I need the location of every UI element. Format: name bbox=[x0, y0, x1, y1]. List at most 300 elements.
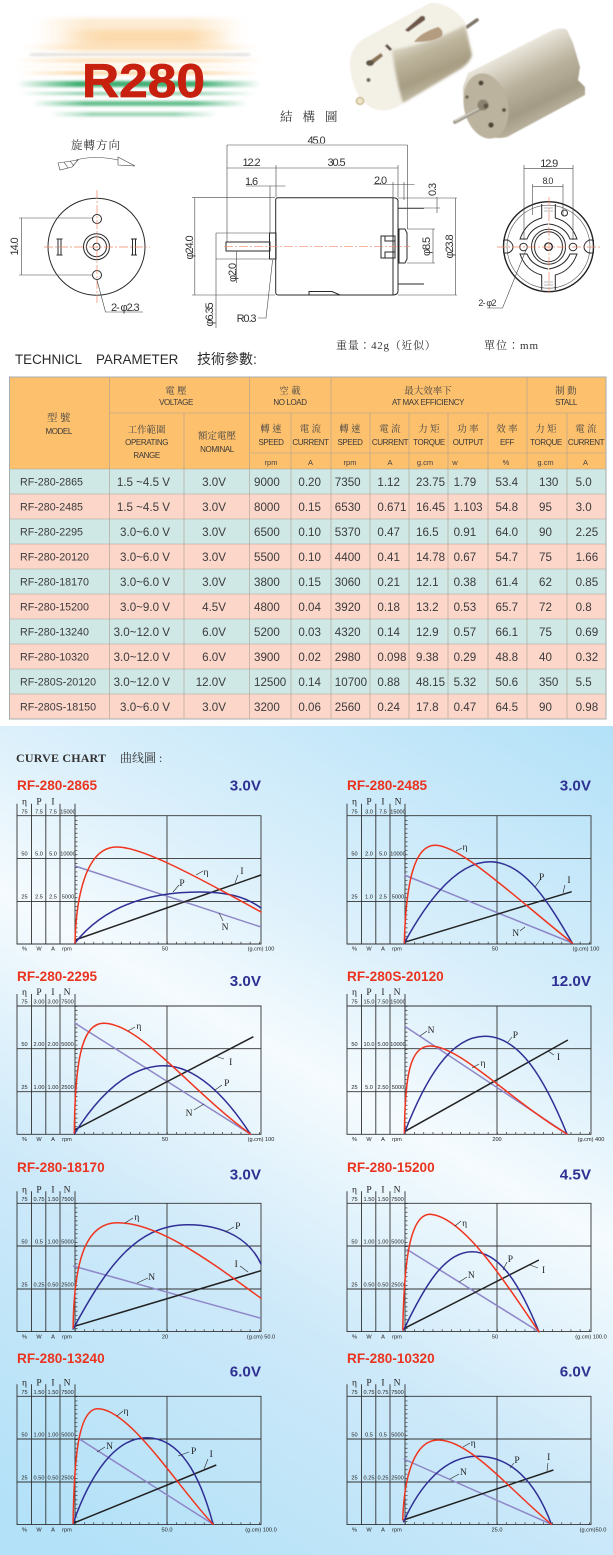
chart: RF-280-2295: P bbox=[36, 988, 42, 998]
table rows: 4400 bbox=[335, 551, 361, 564]
chart: RF-280-2865: 15000 bbox=[60, 809, 76, 815]
chart: RF-280-2485: 5000 bbox=[392, 895, 404, 901]
chart: RF-280-15200: rpm bbox=[392, 1334, 402, 1340]
chart: RF-280-13240: 50.0 bbox=[162, 1527, 172, 1533]
table rows: RF-280S-18150 bbox=[20, 702, 96, 714]
table header: STALL bbox=[555, 398, 578, 407]
chart: RF-280-10320: N bbox=[460, 1468, 467, 1478]
chart: RF-280-2485: 2.5 bbox=[379, 895, 387, 901]
chart: RF-280-2295: 25 bbox=[21, 1085, 28, 1091]
table rows: 0.15 bbox=[298, 576, 321, 589]
table rows: 40 bbox=[539, 651, 552, 664]
chart: RF-280-18170: 2500 bbox=[61, 1282, 74, 1288]
chart: RF-280-15200: P bbox=[508, 1255, 513, 1265]
chart: RF-280S-20120: 75 bbox=[351, 1000, 358, 1006]
table rows: 1.5 ~4.5 V bbox=[117, 476, 170, 489]
table rows: 23.75 bbox=[416, 476, 445, 489]
chart: RF-280-2295: RF-280-2295 bbox=[17, 969, 98, 984]
table header: g.cm bbox=[417, 458, 433, 467]
chart: RF-280-2295: 7500 bbox=[61, 1000, 74, 1006]
chart: RF-280-2485: 7.5 bbox=[379, 809, 387, 815]
table rows: 0.85 bbox=[576, 576, 598, 589]
drawing: side view with dimensions: R0.3 bbox=[237, 313, 256, 325]
chart: RF-280-10320: A bbox=[381, 1527, 385, 1533]
table rows: 14.78 bbox=[416, 551, 445, 564]
chart: RF-280S-20120: W bbox=[366, 1137, 372, 1143]
table rows: 90 bbox=[539, 701, 552, 714]
chart: RF-280-18170: 1.00 bbox=[48, 1239, 58, 1245]
chart: RF-280-2295: 2500 bbox=[61, 1085, 74, 1091]
chart: RF-280-2485: (g.cm) 100 bbox=[573, 947, 599, 953]
table rows: 0.02 bbox=[298, 651, 321, 664]
chart: RF-280-2865: I bbox=[240, 867, 244, 877]
chart: RF-280-2295: 2.00 bbox=[34, 1042, 44, 1048]
table rows: RF-280-2865 bbox=[20, 476, 83, 488]
chart: RF-280-18170: η bbox=[134, 1213, 139, 1223]
chart: RF-280-2485: % bbox=[352, 947, 357, 953]
table rows: 0.03 bbox=[298, 626, 321, 639]
table header bbox=[10, 377, 606, 469]
table rows: 12.1 bbox=[416, 576, 439, 589]
chart: RF-280-18170: 75 bbox=[21, 1197, 28, 1203]
chart: RF-280-13240: 7500 bbox=[61, 1390, 74, 1396]
chart: RF-280S-20120: I bbox=[557, 1053, 560, 1063]
table rows: 3.0V bbox=[202, 576, 226, 589]
chart: RF-280-18170: % bbox=[22, 1334, 27, 1340]
chart: RF-280-2485: 75 bbox=[351, 809, 358, 815]
chart: RF-280-13240: rpm bbox=[62, 1527, 72, 1533]
chart: RF-280-2295: % bbox=[22, 1137, 27, 1143]
table rows: 0.88 bbox=[377, 676, 400, 689]
chart: RF-280-2485: I bbox=[381, 798, 385, 808]
table rows: 0.69 bbox=[576, 626, 598, 639]
chart: RF-280-2295: N bbox=[64, 988, 71, 998]
chart: RF-280S-20120: η bbox=[352, 988, 357, 998]
chart: RF-280-2485: A bbox=[381, 947, 385, 953]
table header: 工作範圍 bbox=[128, 424, 166, 436]
chart: RF-280-2295: 3.0V bbox=[230, 973, 262, 990]
drawing: side view with dimensions: 1.6 bbox=[245, 176, 258, 188]
table header: % bbox=[503, 458, 510, 467]
chart: RF-280-18170: 20 bbox=[162, 1334, 168, 1340]
chart: RF-280-2485: 2.0 bbox=[365, 852, 373, 858]
table rows: 0.32 bbox=[576, 651, 598, 664]
chart: RF-280-13240: 0.50 bbox=[48, 1475, 58, 1481]
chart: RF-280-15200: N bbox=[468, 1271, 475, 1281]
table rows: 0.67 bbox=[454, 551, 476, 564]
chart: RF-280-13240: 1.50 bbox=[48, 1390, 58, 1396]
chart: RF-280-2865: 7.5 bbox=[49, 809, 57, 815]
table rows: 72 bbox=[539, 601, 552, 614]
chart: RF-280-15200: 2500 bbox=[391, 1282, 404, 1288]
motor with shaft bbox=[455, 28, 585, 143]
chart: RF-280S-20120: 5000 bbox=[392, 1085, 404, 1091]
chart: RF-280-13240: 1.00 bbox=[48, 1432, 58, 1438]
table rows: 3.0~6.0 V bbox=[120, 576, 170, 589]
heading: technical parameter bbox=[15, 351, 257, 367]
chart: RF-280-13240: 6.0V bbox=[230, 1364, 262, 1380]
table rows: 0.47 bbox=[454, 701, 476, 714]
chart: RF-280-10320: 25.0 bbox=[492, 1527, 502, 1533]
chart: RF-280S-20120: 10000 bbox=[390, 1042, 406, 1048]
table rows: 3.0~9.0 V bbox=[120, 601, 170, 614]
chart: RF-280-2865 bbox=[17, 778, 274, 953]
table header: 轉 速 bbox=[260, 423, 282, 435]
chart: RF-280S-20120: η bbox=[481, 1059, 486, 1069]
chart: RF-280-2485: η bbox=[352, 798, 357, 808]
chart: RF-280-2865: 5.0 bbox=[49, 852, 57, 858]
table rows: RF-280-20120 bbox=[20, 552, 89, 564]
drawing: side view with dimensions: φ2.0 bbox=[227, 263, 239, 282]
table rows: 3.0V bbox=[202, 476, 226, 489]
table rows: 0.15 bbox=[298, 501, 321, 514]
table rows: 3.0V bbox=[202, 501, 226, 514]
chart: RF-280-10320: rpm bbox=[392, 1527, 402, 1533]
table rows: 7350 bbox=[335, 476, 361, 489]
table header: 電 流 bbox=[379, 423, 401, 435]
chart: RF-280-15200: 50 bbox=[492, 1334, 498, 1340]
table header: g.cm bbox=[537, 458, 554, 467]
table rows: 90 bbox=[539, 526, 552, 539]
table rows: 65.7 bbox=[496, 601, 518, 614]
table header: A bbox=[387, 458, 393, 467]
chart: RF-280-13240: η bbox=[22, 1378, 27, 1388]
table rows: 9000 bbox=[254, 476, 280, 489]
chart: RF-280-10320: 6.0V bbox=[560, 1364, 592, 1380]
chart: RF-280-15200: RF-280-15200 bbox=[347, 1160, 435, 1175]
chart: RF-280-2295: (g.cm) 100 bbox=[248, 1137, 274, 1143]
chart: RF-280-2295: I bbox=[51, 988, 55, 998]
chart: RF-280S-20120: 15000 bbox=[390, 1000, 406, 1006]
chart: RF-280S-20120: 5.00 bbox=[378, 1042, 388, 1048]
chart: RF-280-18170: 0.50 bbox=[48, 1282, 58, 1288]
table rows: 10700 bbox=[335, 676, 367, 689]
table rows: 6.0V bbox=[202, 651, 226, 664]
chart: RF-280-18170: 0.5 bbox=[35, 1239, 43, 1245]
chart: RF-280-13240: RF-280-13240 bbox=[17, 1351, 105, 1366]
icon: rotation arrow bbox=[58, 157, 135, 170]
table rows: 3.0V bbox=[202, 526, 226, 539]
table rows: 61.4 bbox=[496, 576, 519, 589]
chart: RF-280-13240: I bbox=[51, 1378, 55, 1388]
table rows: 1.103 bbox=[454, 501, 483, 514]
table header: TORQUE bbox=[413, 438, 445, 447]
chart: RF-280-2865: 5.0 bbox=[35, 852, 43, 858]
table rows: RF-280-18170 bbox=[20, 576, 89, 588]
table rows: 3900 bbox=[254, 651, 280, 664]
table rows: 1.5 ~4.5 V bbox=[117, 501, 170, 514]
table rows: 12500 bbox=[254, 676, 286, 689]
table header: 電 流 bbox=[300, 423, 322, 435]
chart: RF-280-13240: W bbox=[36, 1527, 42, 1533]
table header: 型 號 bbox=[47, 411, 71, 424]
table header: 功 率 bbox=[457, 423, 479, 435]
chart: RF-280-13240: 5000 bbox=[61, 1432, 74, 1438]
table rows: 3200 bbox=[254, 701, 280, 714]
chart: RF-280-2485: rpm bbox=[392, 947, 402, 953]
table header: OUTPUT bbox=[453, 438, 484, 447]
parameter table bbox=[10, 377, 606, 719]
chart: RF-280-2865: 10000 bbox=[60, 852, 76, 858]
table rows: 54.8 bbox=[496, 501, 518, 514]
table rows: RF-280-13240 bbox=[20, 626, 89, 638]
table rows: 0.8 bbox=[576, 601, 592, 614]
table rows: 0.671 bbox=[377, 501, 406, 514]
table rows: 12.0V bbox=[196, 676, 226, 689]
chart: RF-280-18170: 1.50 bbox=[48, 1197, 58, 1203]
chart: RF-280-18170: P bbox=[235, 1222, 240, 1232]
chart: RF-280S-20120: 200 bbox=[492, 1137, 502, 1143]
table rows: 64.5 bbox=[496, 701, 518, 714]
table rows: 6500 bbox=[254, 526, 280, 539]
chart: RF-280-18170: 5000 bbox=[61, 1239, 74, 1245]
table header: CURRENT bbox=[372, 438, 409, 447]
chart: RF-280-10320: W bbox=[366, 1527, 372, 1533]
chart: RF-280-2865: 2.5 bbox=[35, 895, 43, 901]
table rows: 3.0V bbox=[202, 551, 226, 564]
unit note: 單位：mm bbox=[484, 339, 539, 352]
table rows: 3.0~6.0 V bbox=[120, 551, 170, 564]
chart: RF-280S-20120: (g.cm) 400 bbox=[578, 1137, 604, 1143]
chart: RF-280-18170: I bbox=[235, 1260, 238, 1270]
chart: RF-280-10320: 0.5 bbox=[365, 1432, 373, 1438]
table rows: RF-280-2485 bbox=[20, 502, 83, 514]
table header: 最大效率下 bbox=[404, 385, 452, 397]
chart: RF-280-2865: 50 bbox=[162, 947, 168, 953]
chart: RF-280-18170 bbox=[17, 1160, 275, 1340]
chart: RF-280S-20120: rpm bbox=[392, 1137, 402, 1143]
chart: RF-280-2485: 5.0 bbox=[379, 852, 387, 858]
table header: VOLTAGE bbox=[159, 398, 193, 407]
chart: RF-280-13240: % bbox=[22, 1527, 27, 1533]
chart: RF-280-2865: rpm bbox=[62, 947, 72, 953]
chart: RF-280-2295: I bbox=[229, 1058, 232, 1068]
chart: RF-280-18170: 25 bbox=[21, 1282, 28, 1288]
chart: RF-280-13240: 1.00 bbox=[34, 1432, 44, 1438]
chart: RF-280-15200: η bbox=[352, 1185, 357, 1195]
table rows: 1.12 bbox=[377, 476, 400, 489]
chart: RF-280-2485: 3.0 bbox=[365, 809, 373, 815]
chart: RF-280-10320: % bbox=[352, 1527, 357, 1533]
table rows: 6.0V bbox=[202, 626, 226, 639]
chart: RF-280-2485: 10000 bbox=[390, 852, 406, 858]
table rows: 0.18 bbox=[377, 601, 400, 614]
chart: RF-280-10320: 0.75 bbox=[378, 1390, 388, 1396]
chart: RF-280-2865: 7.5 bbox=[35, 809, 43, 815]
chart: RF-280-13240: A bbox=[51, 1527, 55, 1533]
curve chart background bbox=[0, 726, 613, 1555]
drawing: side view with dimensions: 2.0 bbox=[374, 175, 387, 187]
chart: RF-280-18170: N bbox=[64, 1185, 71, 1195]
table rows: 1.66 bbox=[576, 551, 598, 564]
table rows: 12.9 bbox=[416, 626, 439, 639]
chart: RF-280-18170: A bbox=[51, 1334, 55, 1340]
table rows: 3.0~6.0 V bbox=[120, 526, 170, 539]
chart: RF-280-15200: (g.cm) 100.0 bbox=[575, 1334, 607, 1340]
table rows: 130 bbox=[539, 476, 558, 489]
chart: RF-280-2865: A bbox=[51, 947, 55, 953]
table rows: 95 bbox=[539, 501, 552, 514]
chart: RF-280-15200: 1.50 bbox=[378, 1197, 388, 1203]
table rows: 9.38 bbox=[416, 651, 439, 664]
chart: RF-280-2295: 50 bbox=[21, 1042, 28, 1048]
chart: RF-280-13240: 0.50 bbox=[34, 1475, 44, 1481]
chart: RF-280-2485: 50 bbox=[492, 947, 498, 953]
table rows: 8000 bbox=[254, 501, 280, 514]
heading: technical parameter: 技術參數: bbox=[197, 351, 257, 367]
chart: RF-280-15200: 1.00 bbox=[364, 1239, 374, 1245]
chart: RF-280-10320: 0.75 bbox=[364, 1390, 374, 1396]
chart: RF-280-15200: 1.50 bbox=[364, 1197, 374, 1203]
chart: RF-280-2865: P bbox=[179, 879, 185, 889]
chart: RF-280-2865: % bbox=[22, 947, 27, 953]
chart: RF-280-2485: 25 bbox=[351, 895, 358, 901]
chart: RF-280-2295: rpm bbox=[62, 1137, 72, 1143]
chart: RF-280-18170: W bbox=[36, 1334, 42, 1340]
chart: RF-280-15200: 50 bbox=[351, 1239, 358, 1245]
heading: R280: R280 bbox=[82, 54, 205, 107]
chart: RF-280-10320: N bbox=[394, 1378, 401, 1388]
table rows: 3920 bbox=[335, 601, 361, 614]
table rows: 1.79 bbox=[454, 476, 476, 489]
table header: 效 率 bbox=[496, 423, 518, 435]
table rows: 3800 bbox=[254, 576, 280, 589]
table rows: 62 bbox=[539, 576, 552, 589]
drawing: side view with dimensions: 12.2 bbox=[242, 157, 260, 169]
chart: RF-280-2295: A bbox=[51, 1137, 55, 1143]
table rows: 54.7 bbox=[496, 551, 518, 564]
table header: EFF bbox=[500, 438, 514, 447]
chart: RF-280-13240: P bbox=[191, 1447, 196, 1457]
table rows: 5.0 bbox=[576, 476, 592, 489]
chart: RF-280S-20120: N bbox=[394, 988, 401, 998]
chart: RF-280-15200: 0.50 bbox=[378, 1282, 388, 1288]
chart: RF-280-2295: P bbox=[224, 1079, 229, 1089]
chart: RF-280-18170: η bbox=[22, 1185, 27, 1195]
table header: w bbox=[451, 458, 458, 467]
chart: RF-280-2295: η bbox=[22, 988, 27, 998]
chart: RF-280-13240 bbox=[17, 1351, 277, 1533]
chart: RF-280-2295: 75 bbox=[21, 1000, 28, 1006]
chart: RF-280-13240: η bbox=[124, 1407, 129, 1417]
heading: curve chart bbox=[16, 750, 162, 765]
chart: RF-280-15200: N bbox=[394, 1185, 401, 1195]
chart: RF-280-15200: % bbox=[352, 1334, 357, 1340]
chart: RF-280-2485: 1.0 bbox=[365, 895, 373, 901]
chart: RF-280-18170: 0.25 bbox=[34, 1282, 44, 1288]
table rows: 4320 bbox=[335, 626, 361, 639]
chart: RF-280-2865: 75 bbox=[21, 809, 28, 815]
chart: RF-280-10320: (g.cm)50.0 bbox=[580, 1527, 606, 1533]
table rows: 3.0~6.0 V bbox=[120, 701, 170, 714]
chart: RF-280-2295: 2.00 bbox=[48, 1042, 58, 1048]
chart: RF-280-10320: 50 bbox=[351, 1432, 358, 1438]
title banner: R280 bbox=[14, 18, 264, 116]
table header: TORQUE bbox=[530, 438, 562, 447]
chart: RF-280-2865: W bbox=[36, 947, 42, 953]
chart: RF-280-13240: 1.50 bbox=[34, 1390, 44, 1396]
chart: RF-280-2485: N bbox=[395, 798, 402, 808]
table header: RANGE bbox=[133, 451, 160, 460]
chart: RF-280-2485: RF-280-2485 bbox=[347, 778, 428, 793]
chart: RF-280-13240: N bbox=[64, 1378, 71, 1388]
chart: RF-280S-20120: 25 bbox=[351, 1085, 358, 1091]
drawing: front view with dimensions: 8.0 bbox=[542, 176, 553, 186]
table header: 制 動 bbox=[555, 385, 577, 397]
table rows: 3.0~12.0 V bbox=[114, 651, 170, 664]
chart: RF-280S-20120: P bbox=[366, 988, 372, 998]
table rows: 0.10 bbox=[298, 551, 321, 564]
drawing: rotation direction and rear view: 14.0 bbox=[9, 238, 21, 256]
table header: SPEED bbox=[258, 438, 284, 447]
table rows: 0.91 bbox=[454, 526, 476, 539]
chart: RF-280-2295 bbox=[17, 969, 274, 1143]
chart: RF-280-15200: A bbox=[381, 1334, 385, 1340]
chart: RF-280-13240: (g.cm) 100.0 bbox=[245, 1527, 277, 1533]
chart: RF-280-2865: N bbox=[222, 923, 229, 933]
chart: RF-280-10320: 7500 bbox=[391, 1390, 404, 1396]
table rows: 4800 bbox=[254, 601, 280, 614]
chart: RF-280-10320: 0.5 bbox=[379, 1432, 387, 1438]
chart: RF-280-13240: 2500 bbox=[61, 1475, 74, 1481]
chart: RF-280-10320: 75 bbox=[351, 1390, 358, 1396]
table header: 力 矩 bbox=[418, 423, 440, 435]
table rows: 3.0 bbox=[576, 501, 592, 514]
chart: RF-280-10320: 2500 bbox=[391, 1475, 404, 1481]
chart: RF-280S-20120: 10.0 bbox=[364, 1042, 374, 1048]
chart: RF-280-2865: 50 bbox=[21, 852, 28, 858]
table rows: 4.5V bbox=[202, 601, 226, 614]
chart: RF-280S-20120: RF-280S-20120 bbox=[347, 969, 444, 984]
chart: RF-280-2485 bbox=[347, 778, 599, 953]
chart: RF-280-2295: 3.00 bbox=[48, 1000, 58, 1006]
chart: RF-280-2295: N bbox=[186, 1109, 193, 1119]
chart: RF-280-15200: 5000 bbox=[391, 1239, 404, 1245]
chart: RF-280S-20120 bbox=[347, 969, 604, 1143]
table rows: RF-280S-20120 bbox=[20, 676, 96, 688]
chart: RF-280S-20120: 2.50 bbox=[378, 1085, 388, 1091]
table rows: 0.06 bbox=[298, 701, 321, 714]
chart: RF-280-2865: η bbox=[22, 798, 27, 808]
drawing: rotation direction and rear view: 2- φ2.3 bbox=[111, 302, 140, 314]
chart: RF-280-10320: P bbox=[514, 1456, 520, 1466]
table header: AT MAX EFFICIENCY bbox=[392, 398, 465, 407]
table rows: 2980 bbox=[335, 651, 361, 664]
chart: RF-280-2485: 50 bbox=[351, 852, 358, 858]
chart: RF-280S-20120: % bbox=[352, 1137, 357, 1143]
chart: RF-280-18170: 3.0V bbox=[230, 1166, 262, 1184]
chart: RF-280-15200: P bbox=[366, 1185, 372, 1195]
table rows: 53.4 bbox=[496, 476, 519, 489]
chart: RF-280-2295: W bbox=[36, 1137, 42, 1143]
drawing: side view with dimensions: φ6.35 bbox=[204, 302, 216, 327]
table rows: 0.10 bbox=[298, 526, 321, 539]
chart: RF-280-15200: η bbox=[462, 1219, 467, 1229]
table header: SPEED bbox=[337, 438, 363, 447]
chart: RF-280-10320: η bbox=[352, 1378, 357, 1388]
chart: RF-280-10320 bbox=[347, 1351, 606, 1533]
table header: A bbox=[583, 458, 588, 467]
chart: RF-280-15200: I bbox=[381, 1185, 385, 1195]
chart: RF-280-2485: 3.0V bbox=[560, 778, 592, 794]
chart: RF-280-10320: I bbox=[381, 1378, 385, 1388]
table rows: 16.5 bbox=[416, 526, 439, 539]
chart: RF-280-13240: N bbox=[106, 1442, 113, 1452]
table rows: 75 bbox=[539, 551, 552, 564]
chart: RF-280S-20120: 15.0 bbox=[364, 1000, 374, 1006]
table rows: 3.0V bbox=[202, 701, 226, 714]
chart: RF-280-2295: 50 bbox=[162, 1137, 168, 1143]
